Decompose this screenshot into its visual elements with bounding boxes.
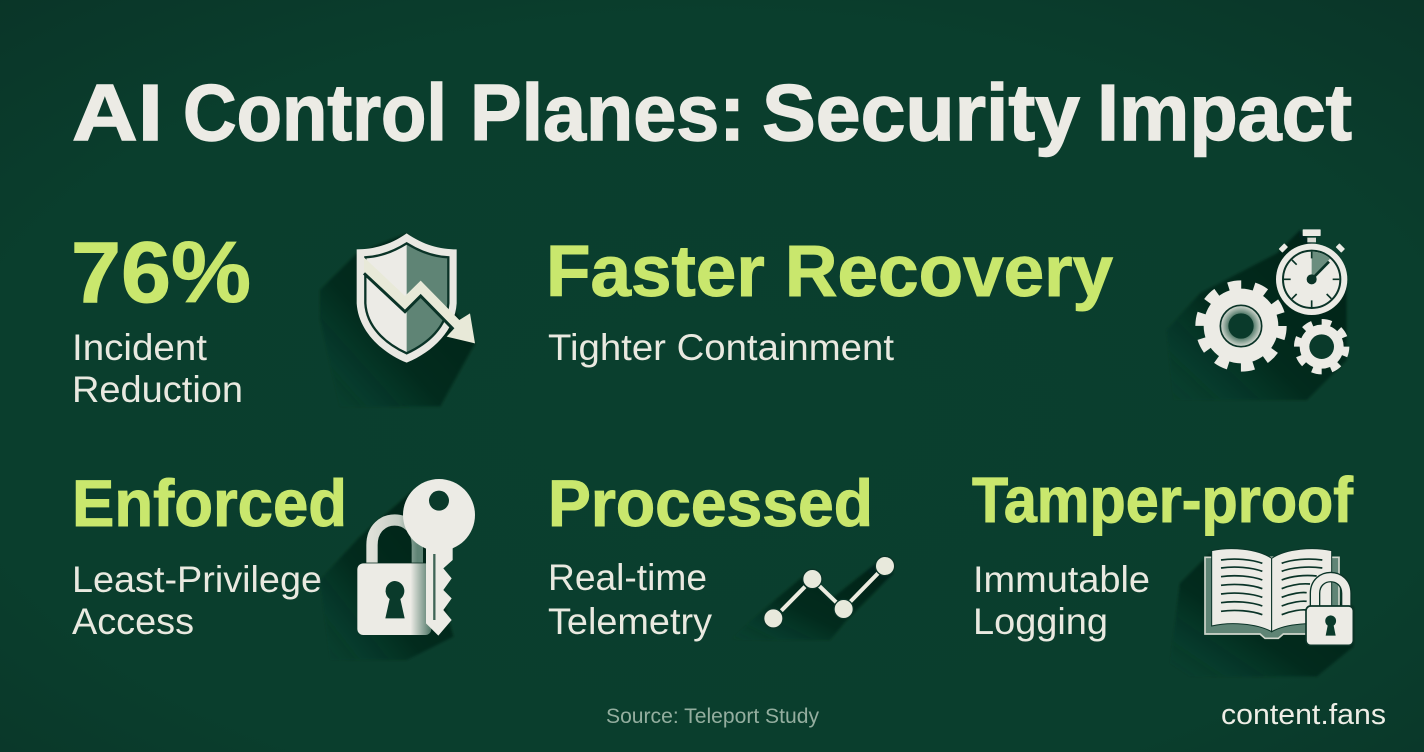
heading: tamper-proof: Tamper-proof [972,464,1354,536]
label: immutable logging: Logging [973,601,1108,642]
small gear [1297,322,1346,371]
title: Impact [1097,68,1352,157]
label: incident reduction: Reduction [72,369,243,410]
icon: padlock and key [320,479,475,660]
label: real-time telemetry: Telemetry [548,601,712,642]
heading: faster recovery: Faster Recovery [546,232,1113,312]
title: Control [183,68,447,157]
label: incident reduction: Incident [72,327,208,368]
icon: shield with downward arrow [320,233,475,407]
stat value: 76%: 76% [71,225,251,321]
title: Security [762,68,1081,157]
label: incident reduction [72,327,243,410]
title: AI [72,68,163,157]
label: least-privilege access [72,559,322,642]
title: Planes: [470,68,745,157]
icon: gears and stopwatch [1167,229,1347,400]
source note: Source: Teleport Study [606,705,819,728]
brand: content.fans: content.fans [1221,699,1386,731]
stopwatch [1276,229,1347,315]
label: least-privilege access: Access [72,601,194,642]
label: real-time telemetry [548,557,712,642]
label: real-time telemetry: Real-time [548,557,707,598]
label: immutable logging [973,559,1150,642]
label: tighter containment: Tighter Containment [548,327,895,368]
heading: processed: Processed [548,466,873,540]
title [72,68,1352,157]
panel: incident reduction stat [71,225,251,410]
label: least-privilege access: Least-Privilege [72,559,322,600]
large gear [1200,285,1282,367]
panel: enforced access [72,466,347,642]
panel: tamper-proof logging [972,464,1354,642]
icon: line graph nodes [730,556,895,640]
heading: enforced: Enforced [72,466,347,540]
panel: processed telemetry [548,466,873,642]
panel: faster recovery [546,232,1113,368]
label: immutable logging: Immutable [973,559,1150,600]
icon: open book with padlock [1170,549,1353,677]
